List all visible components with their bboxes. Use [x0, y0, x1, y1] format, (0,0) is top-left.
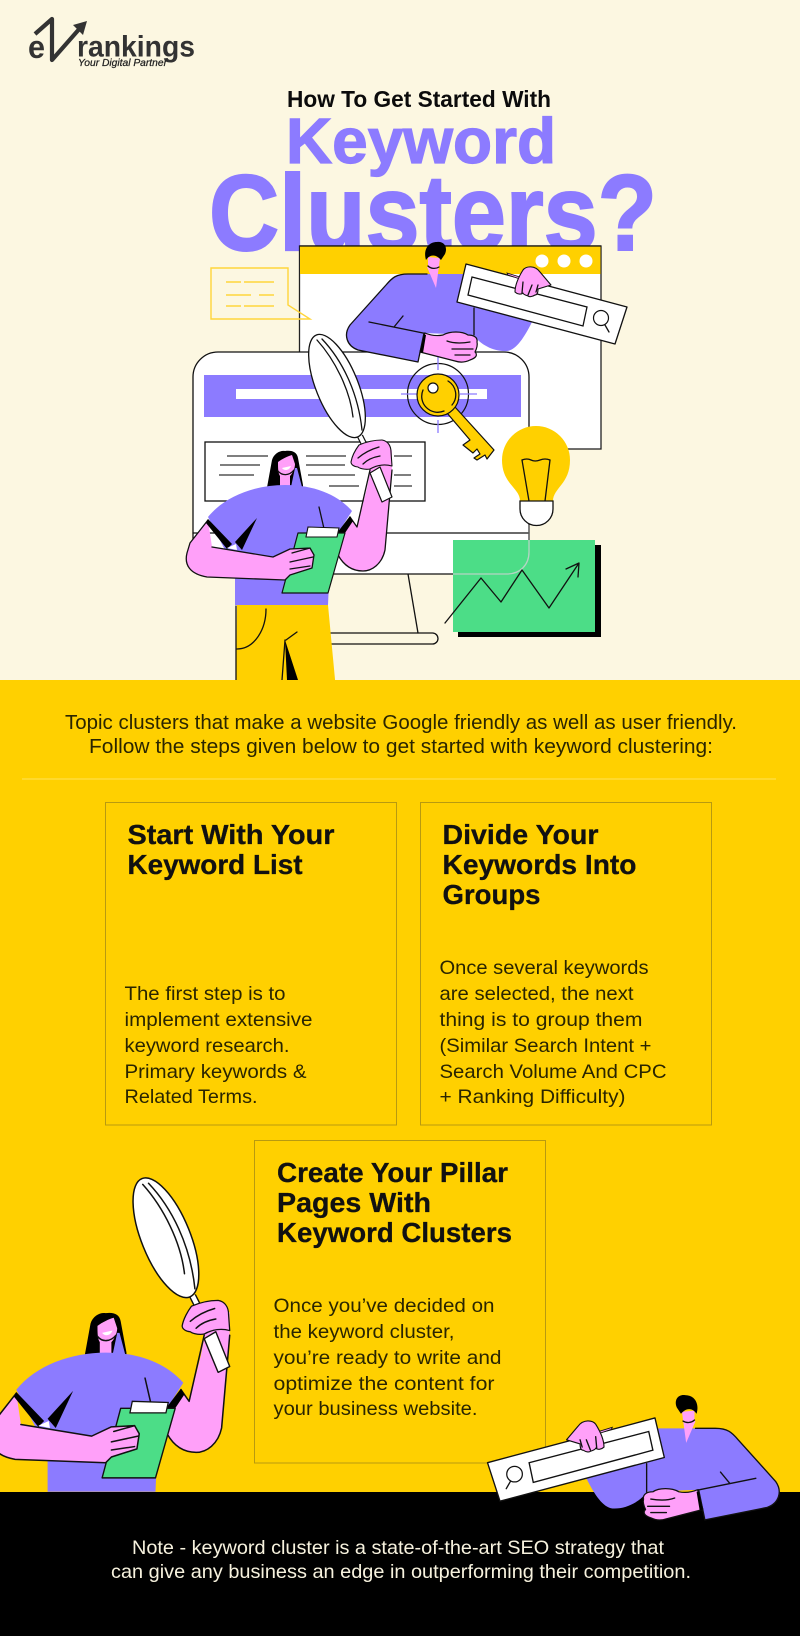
footer note: can give any business an edge in outperforming their competition. — [111, 1561, 691, 1583]
panel: create your pillar pages: Pages With — [277, 1187, 431, 1218]
man illustration, lower right — [488, 1395, 779, 1520]
footer note — [111, 1537, 691, 1583]
panel: create your pillar pages: the keyword cluster, — [274, 1321, 454, 1343]
icon: key with target — [401, 357, 494, 460]
panel: start with your keyword list: The first step is to — [124, 983, 286, 1005]
panel: create your pillar pages: your business website. — [274, 1398, 478, 1420]
chart card — [445, 540, 601, 637]
panel: divide your keywords into groups: Keywords Into — [442, 849, 636, 880]
panel: create your pillar pages: you’re ready to write and — [274, 1347, 502, 1369]
panel: divide your keywords into groups: Search Volume And CPC — [440, 1061, 666, 1083]
footer band — [0, 1492, 800, 1636]
panel: start with your keyword list: Related Terms. — [124, 1086, 258, 1108]
panel: start with your keyword list: keyword research. — [124, 1035, 290, 1057]
title — [209, 86, 657, 273]
panel: divide your keywords into groups: are selected, the next — [440, 983, 634, 1005]
browser window — [300, 246, 601, 449]
panel: create your pillar pages: optimize the content for — [274, 1373, 495, 1395]
speech bubble — [211, 268, 310, 319]
monitor — [193, 352, 529, 644]
panel: divide your keywords into groups: Once several keywords — [440, 957, 649, 979]
yellow content section — [0, 680, 800, 1492]
panel: divide your keywords into groups: thing is to group them — [440, 1009, 642, 1031]
intro text: Follow the steps given below to get started with keyword clustering: — [89, 736, 713, 758]
panel: divide your keywords into groups: + Ranking Difficulty) — [440, 1086, 626, 1108]
man holding search bar — [347, 242, 627, 362]
logo: rankings — [77, 30, 195, 64]
panel: create your pillar pages: Keyword Clusters — [277, 1217, 512, 1248]
footer note: Note - keyword cluster is a state-of-the-art SEO strategy that — [132, 1537, 665, 1559]
panel: start with your keyword list: Primary keywords & — [124, 1061, 306, 1083]
icon: light bulb — [502, 426, 570, 540]
panel: start with your keyword list — [106, 802, 396, 1125]
panel: start with your keyword list: Start With Your — [128, 819, 335, 850]
title: Keyword — [286, 105, 556, 177]
panel: divide your keywords into groups: (Similar Search Intent + — [440, 1035, 652, 1057]
woman with magnifier and clipboard — [186, 327, 392, 690]
panel: create your pillar pages: Create Your Pillar — [277, 1157, 508, 1188]
logo: e — [28, 29, 45, 65]
intro text — [65, 712, 737, 758]
title: Clusters? — [209, 152, 657, 273]
panel: create your pillar pages — [254, 1140, 546, 1463]
panel: divide your keywords into groups: Divide Your — [442, 819, 599, 850]
logo: Your Digital Partner — [78, 57, 167, 69]
panel: start with your keyword list: implement extensive — [124, 1009, 312, 1031]
panel: start with your keyword list: Keyword List — [128, 849, 302, 880]
title: How To Get Started With — [287, 86, 551, 112]
panel: create your pillar pages: Once you’ve decided on — [274, 1295, 494, 1317]
logo — [28, 19, 195, 69]
intro text: Topic clusters that make a website Google friendly as well as user friendly. — [65, 712, 737, 734]
woman illustration, lower left — [0, 1169, 230, 1590]
panel: divide your keywords into groups — [420, 802, 712, 1125]
panel: divide your keywords into groups: Groups — [442, 879, 540, 910]
